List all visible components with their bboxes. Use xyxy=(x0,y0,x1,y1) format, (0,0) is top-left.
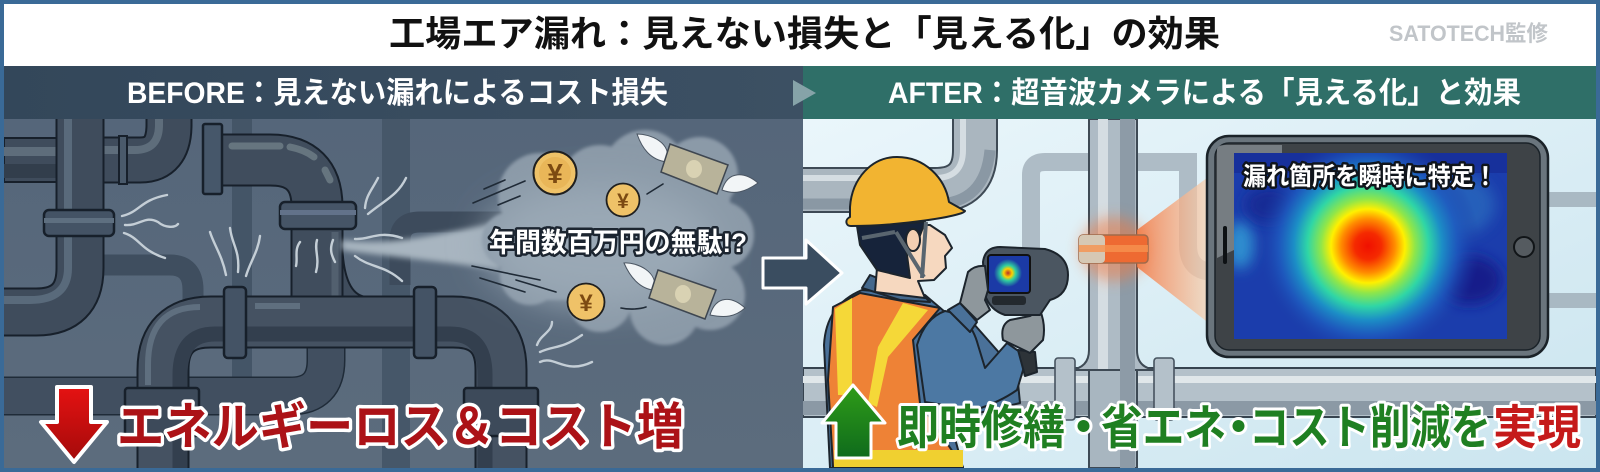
header: after: AFTER：超音波カメラによる「見える化」と効果 xyxy=(888,77,1521,110)
hair xyxy=(857,222,925,278)
panel: before illustration xyxy=(0,110,803,472)
result text: after: 即時修繕 xyxy=(897,401,1065,454)
pipe: large elbow xyxy=(203,124,368,310)
camera grip xyxy=(1018,350,1037,376)
header: before: BEFORE：見えない漏れによるコスト損失 xyxy=(127,77,668,110)
forearm xyxy=(948,303,977,332)
pipe: main vertical xyxy=(1070,119,1156,468)
collar xyxy=(862,275,930,302)
safety vest xyxy=(828,293,963,467)
flying banknote: top xyxy=(637,134,758,194)
ear and strap xyxy=(862,222,926,278)
glove: upper hand xyxy=(960,266,990,320)
ultrasonic beam xyxy=(1137,179,1206,321)
result text: after xyxy=(897,401,1581,454)
screen caption: 漏れ箇所を瞬時に特定！ xyxy=(1243,163,1497,191)
pipe: lower main xyxy=(125,287,538,472)
tablet xyxy=(1207,134,1548,358)
panel: after illustration xyxy=(800,110,1596,468)
coin: small xyxy=(606,184,640,216)
arrow: before to after xyxy=(763,240,842,304)
thin background pipes xyxy=(1022,153,1596,316)
worker body xyxy=(824,290,1020,468)
coin: large: ¥ xyxy=(547,158,563,189)
thermal screen xyxy=(1234,153,1507,339)
coin: lower xyxy=(568,284,604,320)
glowing leak flange xyxy=(1079,217,1148,281)
coin: small: ¥ xyxy=(617,190,629,213)
pipe: left vertical xyxy=(0,110,114,312)
background pipes xyxy=(4,119,520,468)
arrow: green up xyxy=(822,385,885,458)
work sleeve xyxy=(917,311,1027,410)
glove: lower hand xyxy=(1002,310,1044,353)
result text: after: コスト削減を xyxy=(1249,401,1491,454)
coin: large xyxy=(534,152,576,194)
callout: annual waste: 年間数百万円の無駄!? xyxy=(489,228,747,258)
header: before xyxy=(4,66,803,119)
pipe: left horizontal xyxy=(4,138,58,182)
neck and face xyxy=(875,225,952,298)
pipe: top left elbow xyxy=(800,110,990,204)
vapour cloud and jet xyxy=(342,130,754,345)
result text: after: ・ xyxy=(1215,401,1262,454)
title: 工場エア漏れ：見えない損失と「見える化」の効果 xyxy=(389,13,1220,54)
coin: lower: ¥ xyxy=(579,290,593,317)
header: after xyxy=(803,66,1596,119)
worker xyxy=(824,157,1068,468)
leak wisps xyxy=(122,178,592,367)
thermal camera xyxy=(983,247,1068,315)
flying banknote: bottom xyxy=(624,263,745,319)
pipe: upper elbow xyxy=(95,110,169,184)
arrow: header transition xyxy=(793,80,816,106)
speed lines xyxy=(472,180,663,309)
result text: after: ・ xyxy=(1060,401,1107,454)
result text: after: 省エネ xyxy=(1101,401,1226,454)
arrow: red down xyxy=(41,387,107,462)
pipe clamps xyxy=(1055,358,1174,420)
result text: before: エネルギーロス＆コスト増 xyxy=(117,399,684,455)
supervisor credit: SATOTECH監修 xyxy=(1389,21,1548,46)
result text: after: 実現 xyxy=(1493,401,1581,454)
pipe: bottom horizontal xyxy=(803,368,1596,417)
hard hat xyxy=(846,157,965,226)
title bar xyxy=(4,4,1596,66)
